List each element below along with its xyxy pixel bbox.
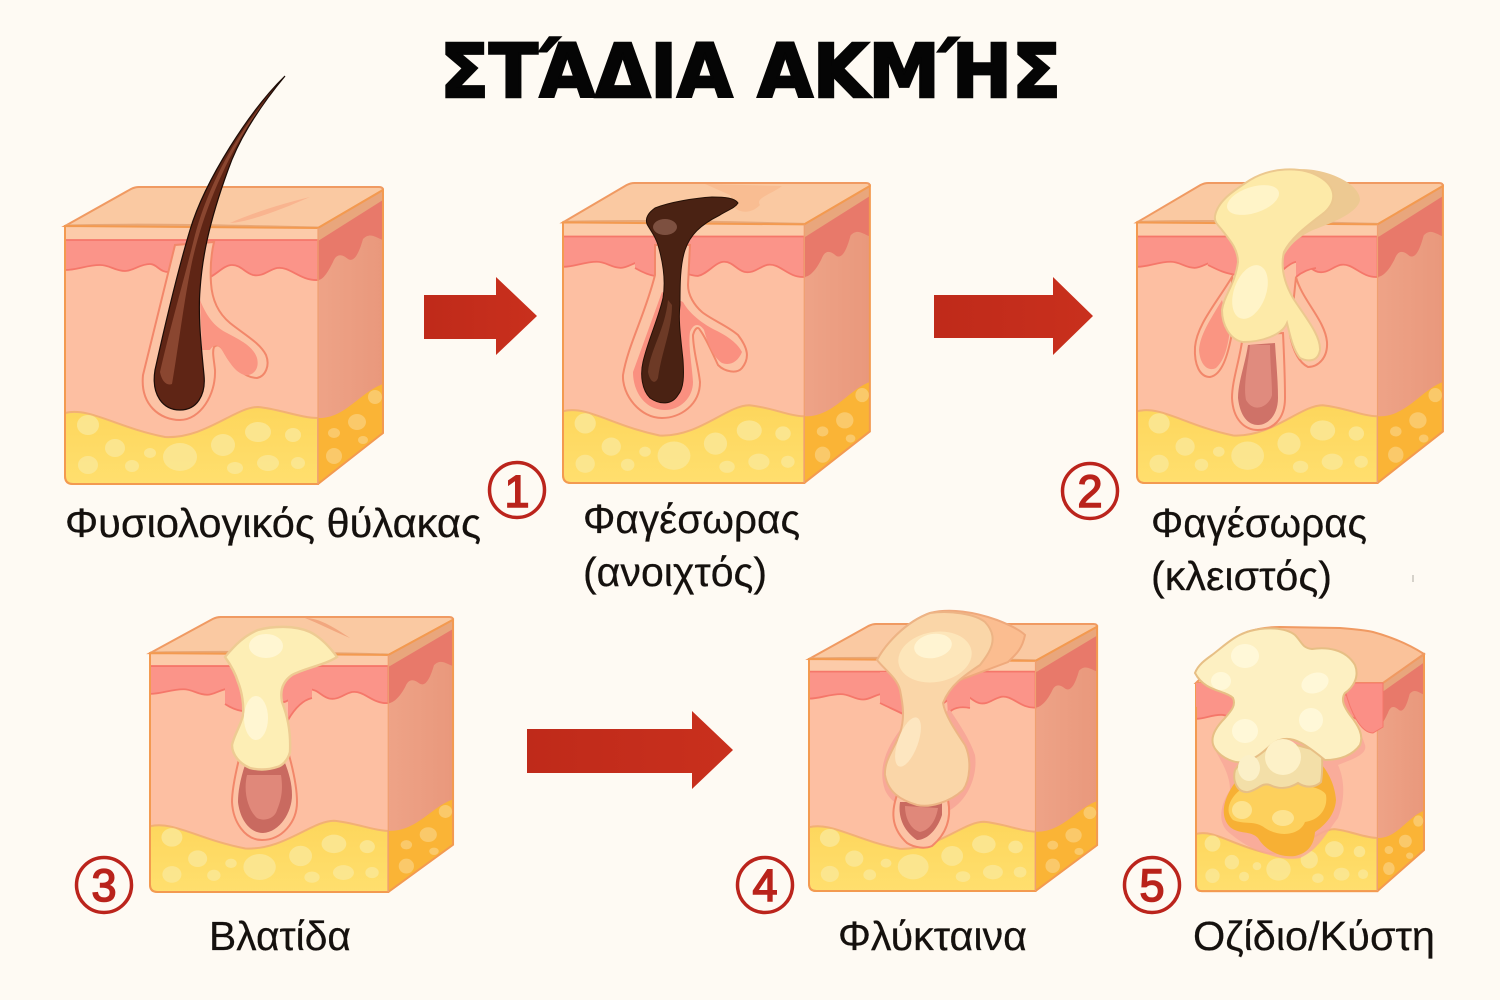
skin cube bbox=[150, 617, 453, 892]
hair shaft bbox=[154, 76, 285, 410]
panel: closed comedone bbox=[1137, 169, 1443, 599]
skin cube body bbox=[1196, 654, 1424, 891]
label bbox=[1151, 500, 1367, 599]
follicle sheath bbox=[232, 748, 297, 840]
gland interior bbox=[633, 292, 742, 410]
number badge 5: 5 bbox=[1139, 860, 1165, 911]
inflamed halo bbox=[882, 710, 976, 812]
label: Φυσιολογικός θύλακας bbox=[65, 500, 481, 546]
label: Φαγέσωρας bbox=[1151, 500, 1367, 546]
number badge 4 bbox=[738, 858, 792, 912]
inflamed sac bbox=[238, 758, 292, 833]
inflamed sac bbox=[893, 795, 949, 848]
sebum plug bbox=[1215, 169, 1360, 360]
band curving to follicle bbox=[635, 240, 710, 276]
deep yellow nodule bbox=[1224, 765, 1336, 856]
panel: pustule bbox=[809, 611, 1097, 959]
follicle sheath and sebaceous gland bbox=[143, 242, 268, 420]
arrow 1 bbox=[424, 277, 537, 355]
band curving to follicle bbox=[225, 675, 312, 720]
panel: normal follicle bbox=[65, 76, 481, 546]
panel: papule bbox=[150, 617, 453, 959]
small speck bbox=[1412, 575, 1414, 582]
skin cube bbox=[65, 187, 383, 484]
label: Φαγέσωρας bbox=[583, 496, 800, 542]
dark comedone plug bbox=[642, 197, 738, 403]
number badge 2: 2 bbox=[1077, 466, 1103, 517]
halo around mass bbox=[1212, 720, 1365, 859]
number badge 5 bbox=[1124, 858, 1180, 912]
number badge 3: 3 bbox=[91, 860, 117, 911]
domed top face bbox=[1196, 627, 1424, 683]
title: ΣΤΆΔΙΑ ΑΚΜΉΣ bbox=[440, 29, 1061, 115]
panel: open comedone bbox=[563, 183, 870, 595]
inflamed surround bbox=[1345, 683, 1383, 733]
label: Φλύκταινα bbox=[838, 913, 1027, 959]
band curving to follicle bbox=[1208, 238, 1316, 277]
label: Βλατίδα bbox=[209, 913, 351, 959]
top face stain bbox=[705, 184, 782, 212]
band at left bbox=[1196, 683, 1235, 707]
top face stain bbox=[305, 618, 350, 638]
label: (ανοιχτός) bbox=[583, 549, 767, 595]
sebum plug bbox=[225, 627, 337, 769]
label: Οζίδιο/Κύστη bbox=[1193, 913, 1435, 959]
label bbox=[583, 496, 800, 595]
right gland bbox=[1290, 277, 1327, 367]
follicle sheath and gland bbox=[623, 245, 747, 418]
skin cube bbox=[563, 183, 870, 483]
arrow 2 bbox=[934, 277, 1093, 355]
cream pus mass bbox=[1195, 628, 1361, 792]
number badge 1 bbox=[490, 462, 544, 518]
number badge 3 bbox=[76, 858, 132, 912]
skin cube bbox=[809, 624, 1097, 891]
number badge 4: 4 bbox=[752, 860, 778, 911]
number badge 2 bbox=[1062, 464, 1118, 518]
label: (κλειστός) bbox=[1151, 553, 1332, 599]
lower follicle sac bbox=[1232, 333, 1285, 430]
number badge 1: 1 bbox=[504, 466, 530, 517]
arrow 3 bbox=[527, 711, 733, 789]
band curving to follicle bbox=[880, 672, 970, 714]
pus dome bbox=[877, 611, 1025, 806]
left gland bbox=[1195, 277, 1232, 377]
skin cube bbox=[1137, 183, 1443, 483]
top face streak bbox=[230, 197, 310, 223]
panel: nodule / cyst bbox=[1193, 627, 1435, 959]
